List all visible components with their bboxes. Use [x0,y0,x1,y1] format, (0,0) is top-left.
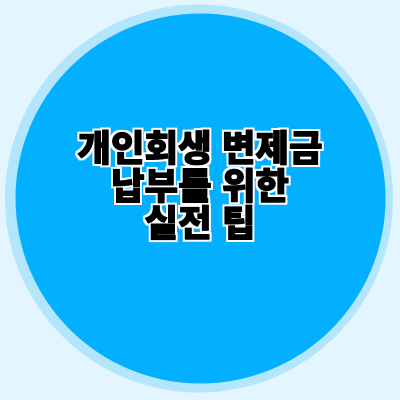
title: 납부를 위한 [111,166,289,207]
title: 실전 팁 [145,203,255,244]
title: 개인회생 변제금 [77,128,323,169]
title [77,128,323,244]
